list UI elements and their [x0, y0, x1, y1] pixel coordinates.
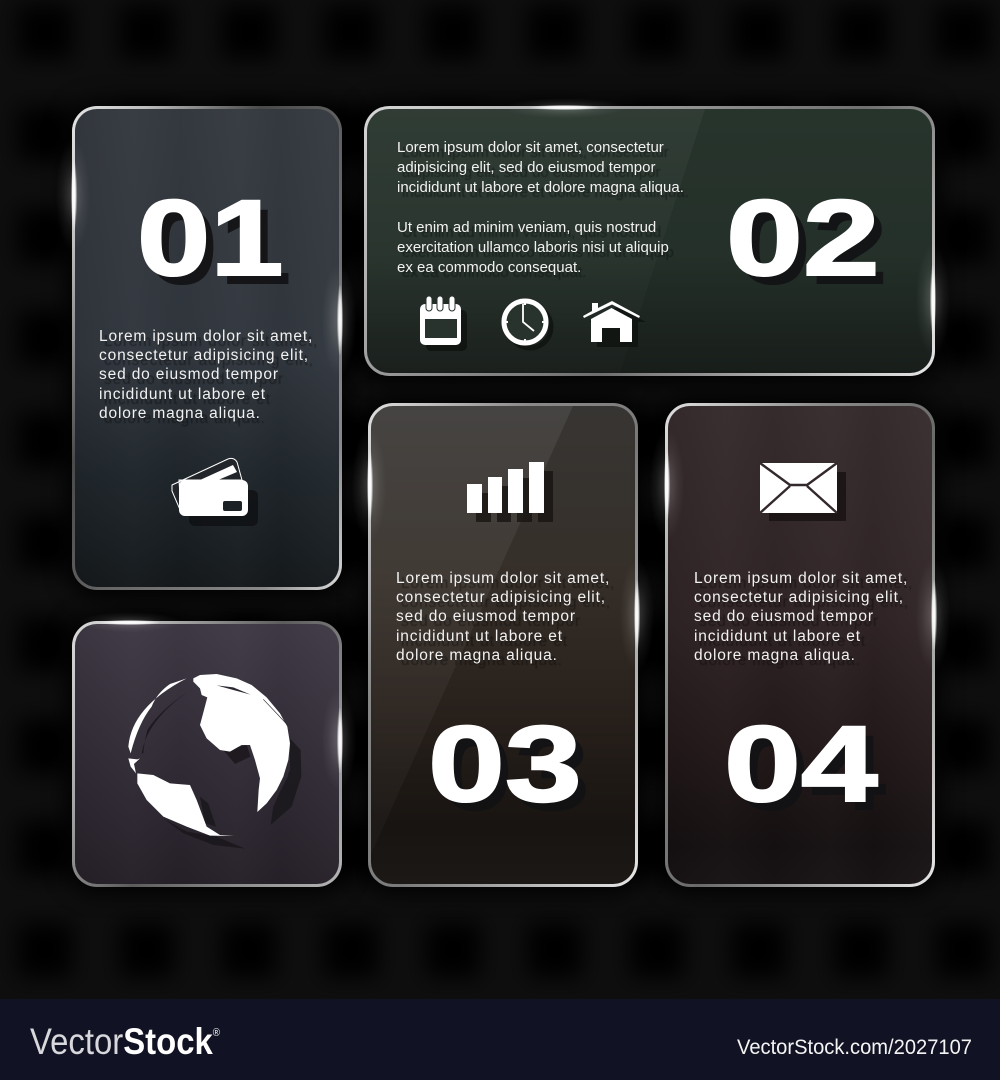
icon: bar chart	[467, 462, 553, 522]
text block: 01	[99, 328, 316, 426]
text block: 03: incididunt ut labore et	[396, 628, 563, 645]
icon: globe	[128, 674, 301, 849]
panel: 04 card	[665, 403, 935, 887]
text block: 04: sed do eiusmod tempor	[694, 608, 874, 625]
footer bar	[0, 999, 1000, 1080]
text block: 03: dolore magna aliqua.	[396, 647, 558, 664]
glass sheen: 03	[371, 406, 573, 733]
footer logo: VectorStock	[30, 1021, 224, 1062]
panel: 01 card	[72, 106, 342, 590]
text block: 01: dolore magna aliqua.	[99, 405, 261, 422]
text block: 04: Lorem ipsum dolor sit amet,	[694, 570, 908, 587]
footer logo: ®	[213, 1027, 220, 1039]
text block: 01: consectetur adipisicing elit,	[99, 347, 309, 364]
text block: 04: incididunt ut labore et	[694, 628, 861, 645]
icon: envelope	[760, 463, 846, 521]
text block: 02: Lorem ipsum dolor sit amet, consectetur	[397, 139, 664, 156]
text block: 01: Lorem ipsum dolor sit amet,	[99, 328, 313, 345]
number 02: 02	[726, 177, 880, 298]
panel: 02 card	[364, 106, 935, 376]
text block: 04: dolore magna aliqua.	[694, 647, 856, 664]
icon: calendar	[420, 296, 467, 351]
number 03: 03	[428, 703, 582, 824]
text block: 02	[397, 139, 688, 280]
text block: 01: sed do eiusmod tempor	[99, 366, 279, 383]
text block: 02: incididunt ut labore et dolore magna aliqua.	[397, 179, 684, 196]
icon: home	[583, 301, 646, 347]
text block: 03: consectetur adipisicing elit,	[396, 589, 606, 606]
glass sheen: 02	[369, 109, 704, 123]
text block: 02: exercitation ullamco laboris nisi ut aliquip	[397, 239, 669, 256]
glass streaks: 01	[75, 109, 339, 587]
icon: credit cards	[172, 458, 258, 526]
text block: 03: Lorem ipsum dolor sit amet,	[396, 570, 610, 587]
panel: 03 card	[368, 403, 638, 887]
text block: 02: Ut enim ad minim veniam, quis nostrud	[397, 219, 656, 236]
text block: 04	[694, 570, 911, 668]
glass streaks: globe	[75, 624, 339, 884]
number 04: 04	[724, 703, 878, 824]
text block: 03: sed do eiusmod tempor	[396, 608, 576, 625]
icon: clock	[504, 301, 551, 348]
text block: 03	[396, 570, 613, 668]
panel: globe card	[72, 621, 342, 887]
text block: 02: ex ea commodo consequat.	[397, 259, 581, 276]
glass streaks: 04	[668, 406, 932, 884]
footer reference: VectorStock.com/2027107	[737, 1036, 972, 1059]
number 01: 01	[137, 177, 284, 298]
text block: 04: consectetur adipisicing elit,	[694, 589, 904, 606]
text block: 02: adipisicing elit, sed do eiusmod tempor	[397, 159, 655, 176]
text block: 01: incididunt ut labore et	[99, 386, 266, 403]
